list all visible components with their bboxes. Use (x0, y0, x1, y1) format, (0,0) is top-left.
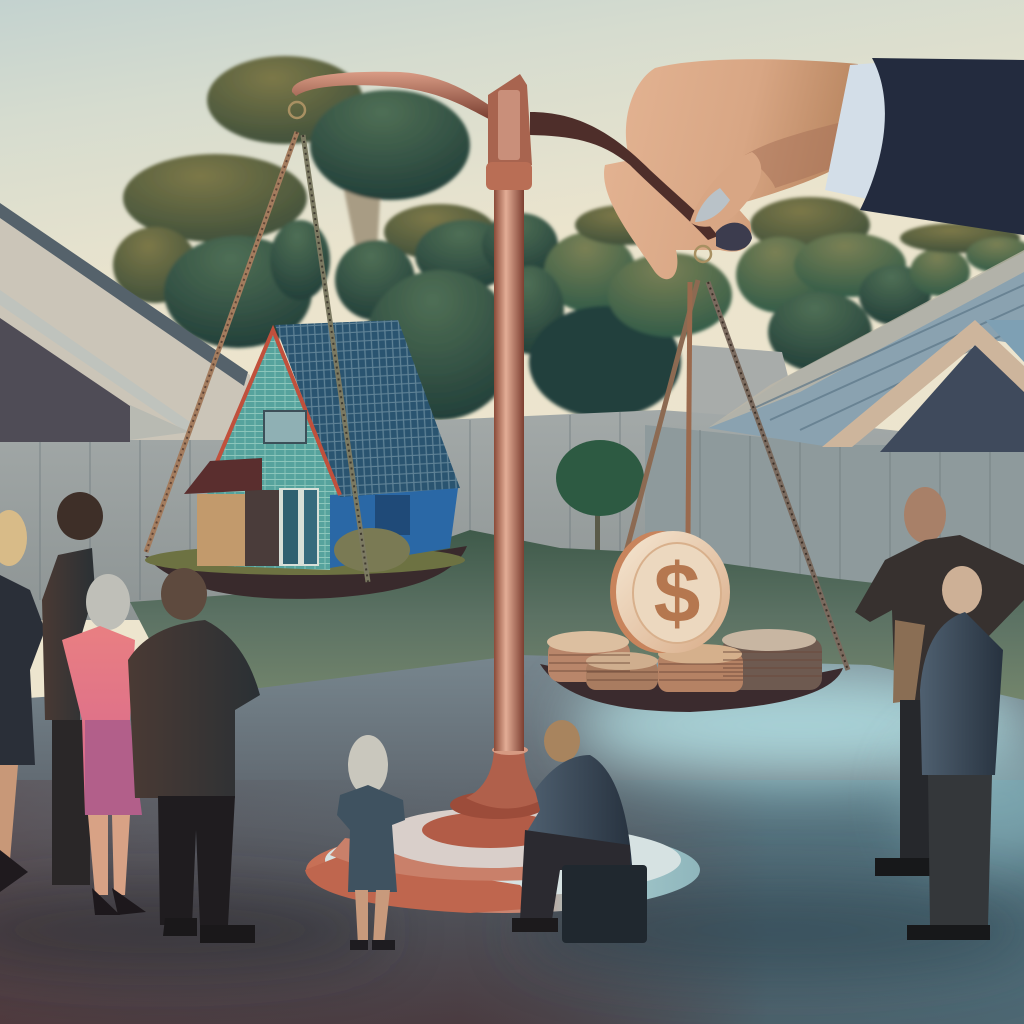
thumb (690, 152, 761, 251)
shirt cuff and suit sleeve (825, 58, 1024, 235)
ground surface (0, 650, 1024, 1024)
house on left pan (184, 320, 460, 572)
coins on right pan (547, 531, 822, 692)
scale pivot (486, 74, 532, 190)
fence (0, 345, 1024, 620)
person: man from behind (128, 568, 260, 943)
person: man in dark suit (42, 492, 103, 885)
person: small woman (337, 735, 405, 950)
coins on right pan: $ (654, 546, 700, 640)
left chain outer (146, 102, 305, 552)
person: grey haired man on right (907, 566, 1003, 940)
hand pressing the beam (604, 59, 858, 279)
person: woman far left (0, 510, 45, 892)
right scale beam (530, 112, 718, 240)
left scale beam (292, 72, 500, 122)
right pan (540, 664, 843, 712)
person: woman in pink dress (62, 574, 146, 915)
left pan (145, 545, 467, 599)
small bush behind scale (556, 440, 644, 555)
right chains (625, 246, 848, 670)
grass (130, 530, 1024, 705)
person: bald man with beard on right (855, 487, 1024, 876)
right neighbour house (708, 250, 1024, 452)
person: seated thinking man (512, 720, 647, 943)
background trees (113, 56, 1024, 420)
left neighbour house (0, 203, 250, 442)
scale base (305, 745, 700, 913)
scale pole (494, 186, 524, 751)
left chain inner (303, 135, 368, 582)
